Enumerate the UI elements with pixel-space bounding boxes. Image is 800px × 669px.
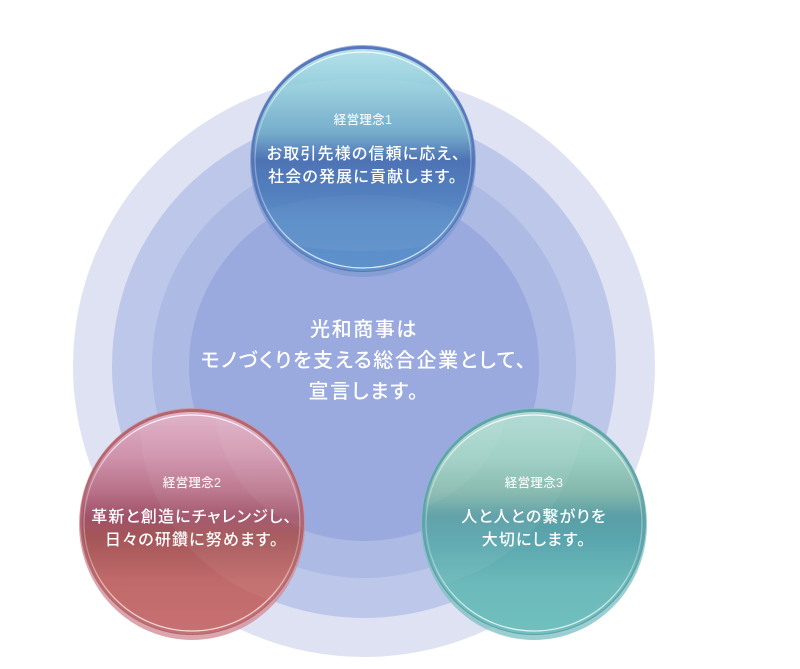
label: philosophy 1: 経営理念1 (334, 112, 392, 127)
message: philosophy 1: お取引先様の信頼に応え、 (267, 145, 461, 163)
label: philosophy 2: 経営理念2 (163, 475, 221, 490)
central statement text (201, 318, 527, 403)
philosophy circle 3 (teal) (421, 408, 647, 640)
central statement text: 光和商事は (310, 318, 418, 341)
message: philosophy 2: 革新と創造にチャレンジし、 (91, 508, 293, 526)
label: philosophy 3: 経営理念3 (505, 475, 563, 490)
background concentric circles (73, 75, 655, 657)
message: philosophy 1 (267, 145, 461, 186)
central statement text: 宣言します。 (308, 380, 420, 403)
message: philosophy 2: 日々の研鑽に努めます。 (105, 531, 279, 549)
philosophy circle 2 (red) (79, 408, 305, 640)
message: philosophy 3: 大切にします。 (482, 531, 586, 549)
philosophy circle 1 (blue) (250, 45, 476, 277)
message: philosophy 3: 人と人との繋がりを (461, 507, 607, 526)
central statement text: モノづくりを支える総合企業として、 (201, 349, 527, 372)
message: philosophy 2 (91, 508, 293, 549)
message: philosophy 3 (461, 507, 607, 549)
message: philosophy 1: 社会の発展に貢献します。 (268, 168, 458, 186)
